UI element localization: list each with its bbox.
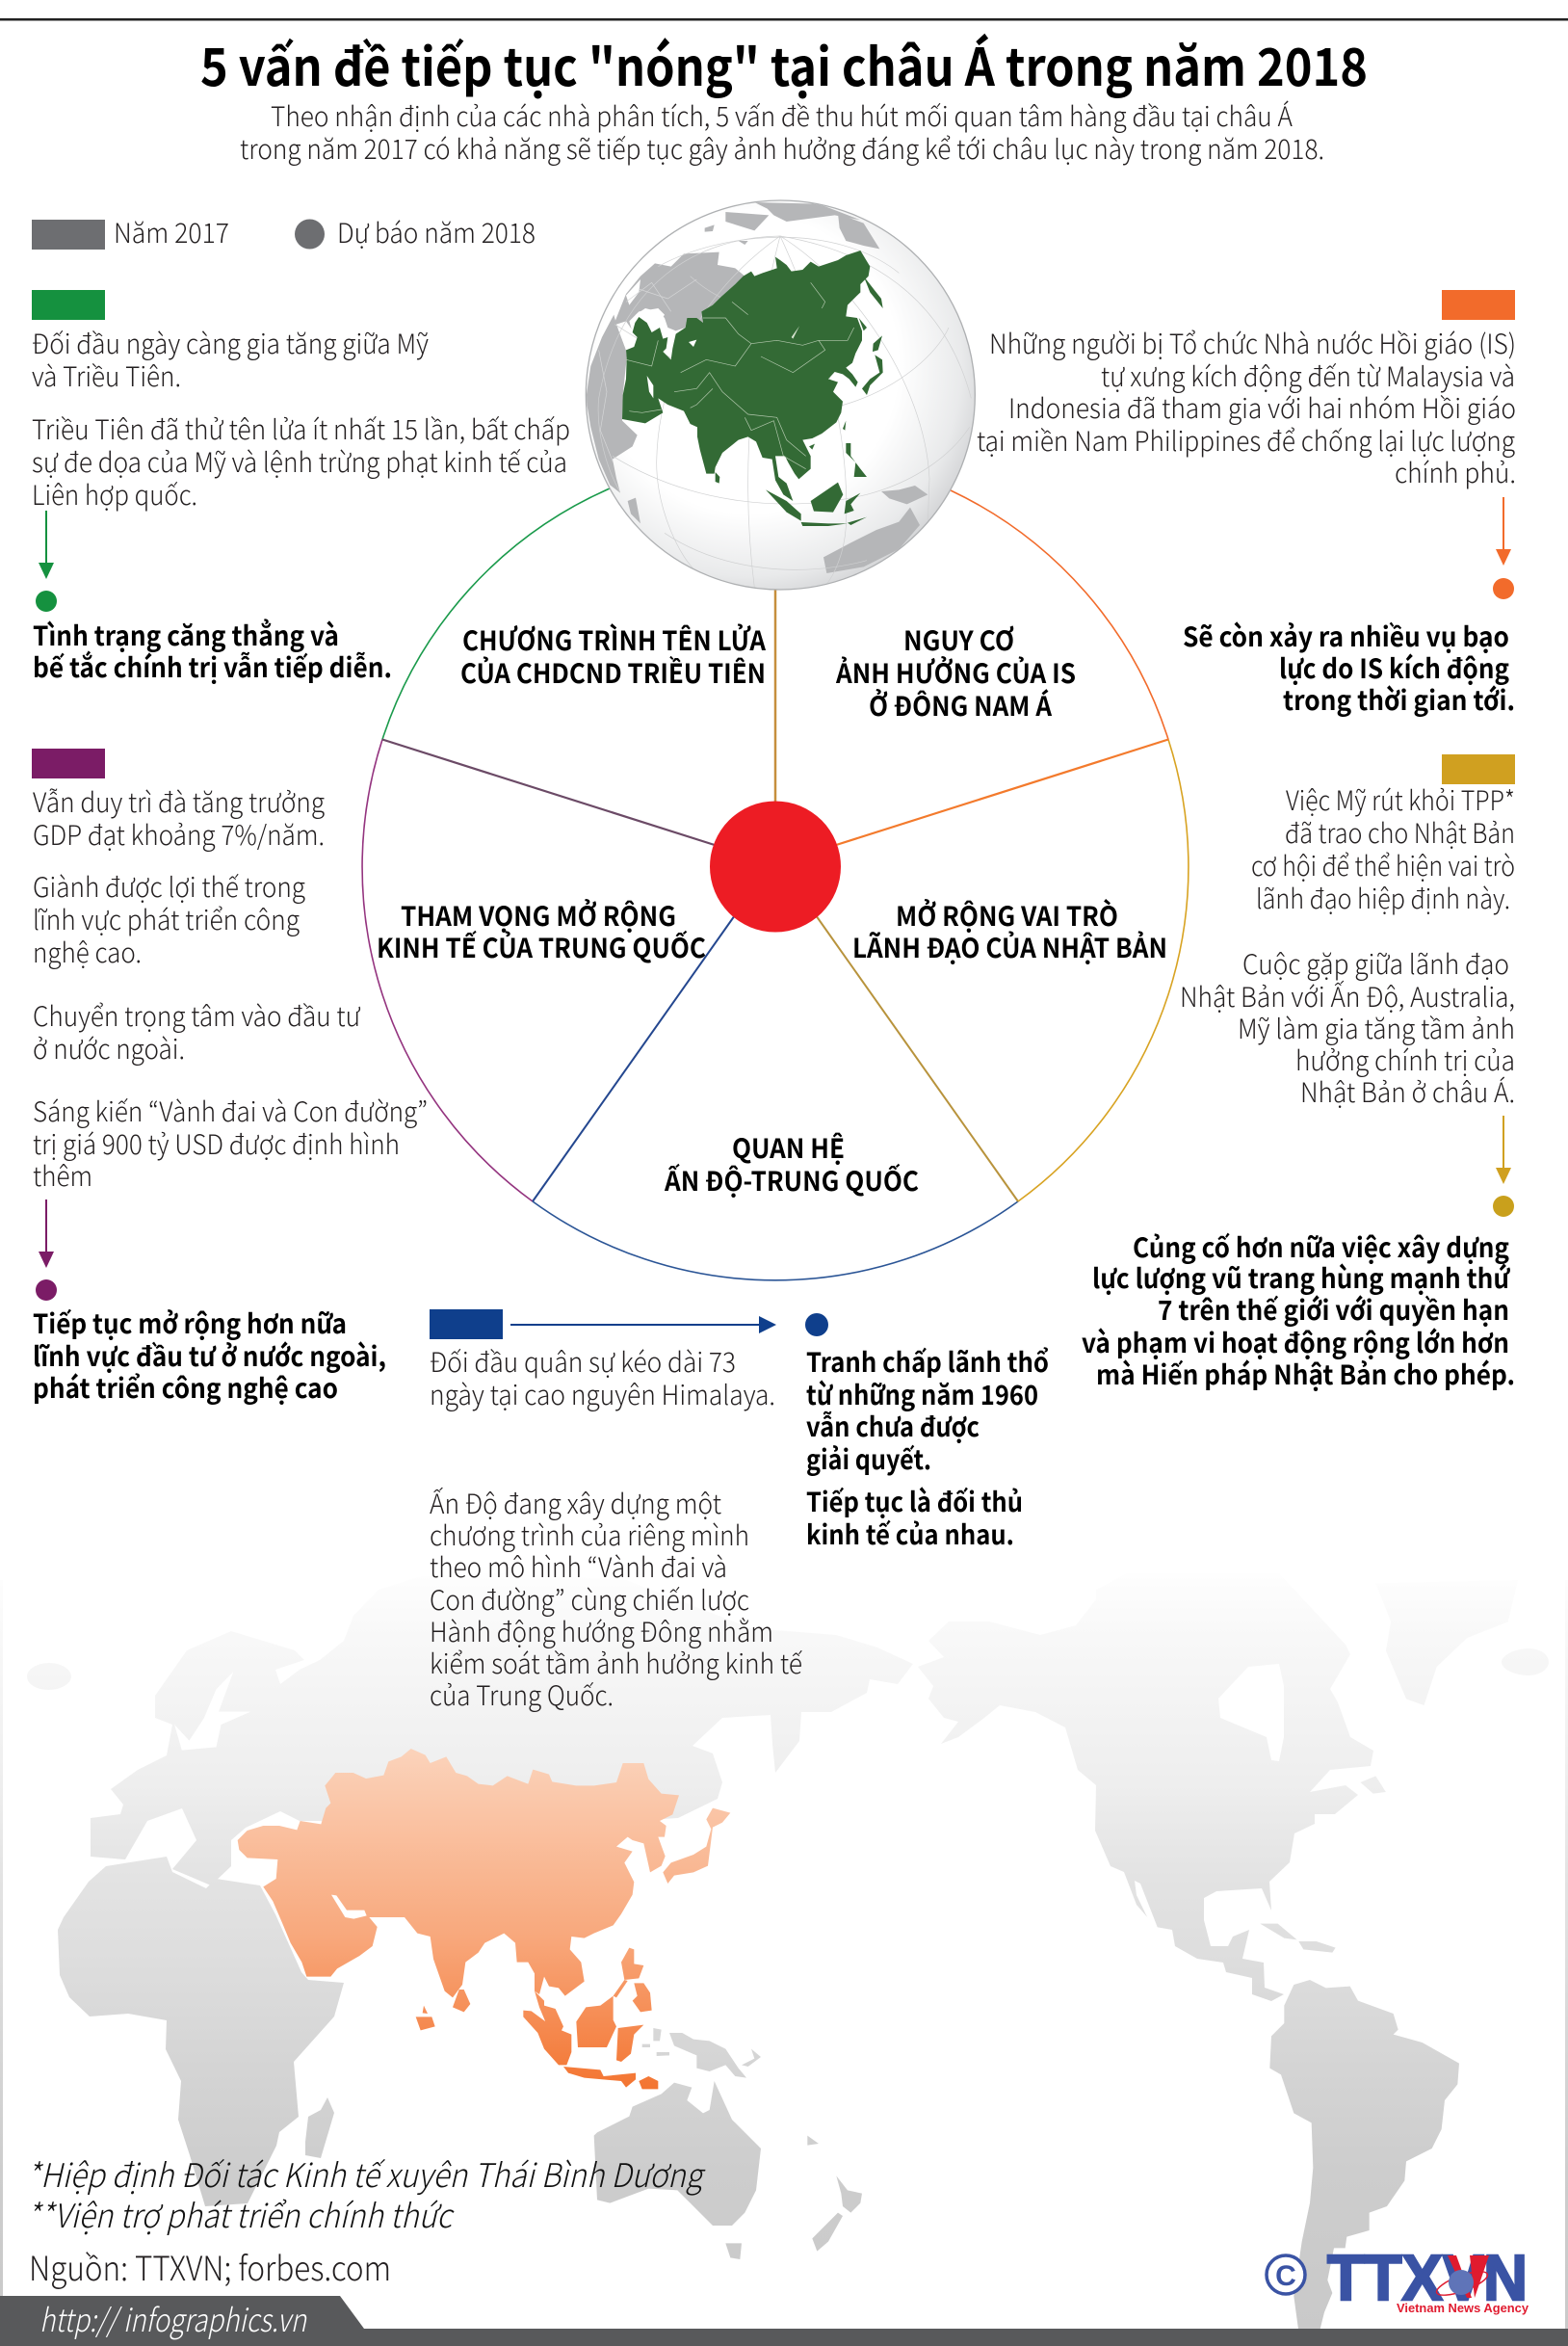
forecast text: trong thời gian tới. [1283, 680, 1515, 719]
footnotes: **Viện trợ phát triển chính thức [27, 2190, 455, 2237]
intro text: trong năm 2017 có khả năng sẽ tiếp tục gây ảnh hưởng đáng kể tới châu lục này trong năm 2018. [240, 129, 1324, 168]
text: 2017: theo mô hình “Vành đai và [430, 1547, 727, 1586]
forecast text: bế tắc chính trị vẫn tiếp diễn. [33, 647, 392, 686]
text: 2017: Những người bị Tổ chức Nhà nước Hồi giáo (IS) [989, 324, 1516, 362]
text: 2017 [977, 324, 1516, 491]
text: 2017: tự xưng kích động đến từ Malaysia và [1101, 356, 1515, 395]
forecast dot [36, 1279, 57, 1301]
wheel labels: ẤN ĐỘ-TRUNG QUỐC [664, 1161, 919, 1199]
text: 2017: đã trao cho Nhật Bản [1285, 813, 1515, 852]
text: 2017: Con đường” cùng chiến lược [430, 1580, 749, 1619]
legend: Năm 2017 [114, 213, 229, 251]
top rule [0, 18, 1568, 21]
forecast text: vẫn chưa được [806, 1407, 980, 1445]
forecast text: và phạm vi hoạt động rộng lớn hơn [1082, 1323, 1509, 1361]
text: 2017 [32, 324, 570, 514]
forecast text: lực lượng vũ trang hùng mạnh thứ [1092, 1258, 1510, 1297]
text: 2017: trị giá 900 tỷ USD được định hình [33, 1124, 400, 1163]
legend [32, 213, 536, 251]
text: 2017: Chuyển trọng tâm vào đầu tư [33, 996, 360, 1035]
wheel labels: Ở ĐÔNG NAM Á [869, 686, 1053, 725]
map: water cut-outs [174, 1664, 1284, 1929]
text: 2017: sự đe dọa của Mỹ và lệnh trừng phạt kinh tế của [32, 442, 567, 481]
text: 2017 [430, 1342, 802, 1714]
wheel labels: QUAN HỆ [732, 1128, 845, 1167]
text: 2017: của Trung Quốc. [430, 1675, 614, 1714]
forecast text: từ những năm 1960 [806, 1375, 1038, 1413]
wheel labels: KINH TẾ CỦA TRUNG QUỐC [377, 928, 706, 966]
website url: http:// infographics.vn [39, 2295, 307, 2341]
text: 2017: và Triều Tiên. [32, 356, 181, 395]
panel: IS in Southeast Asia [977, 290, 1516, 719]
arrow [510, 1316, 776, 1333]
forecast text: Tiếp tục mở rộng hơn nữa [33, 1304, 347, 1342]
text: 2017: Vẫn duy trì đà tăng trưởng [33, 782, 325, 821]
text: 2017: Việc Mỹ rút khỏi TPP* [1286, 780, 1515, 819]
forecast text: phát triển công nghệ cao [33, 1368, 338, 1407]
footer bar [0, 2295, 1568, 2346]
text: 2017: chương trình của riêng mình [430, 1516, 749, 1554]
panel: China [32, 749, 428, 1407]
colour key: green [32, 290, 105, 320]
forecast text: mà Hiến pháp Nhật Bản cho phép. [1096, 1355, 1515, 1393]
footnotes [27, 2149, 706, 2237]
panel: Japan [1082, 754, 1515, 1393]
forecast text [33, 616, 392, 686]
map: Red Sea gulf cut-out [331, 1895, 367, 1919]
text: 2017: hưởng chính trị của [1295, 1041, 1515, 1079]
text: 2017: tại miền Nam Philippines để chống lại lực lượng [977, 421, 1515, 460]
world map: grey continents [27, 1654, 1549, 2329]
globe: inland water and borders [599, 279, 854, 469]
colour key: blue [430, 1309, 503, 1339]
forecast text [1082, 1227, 1515, 1393]
text: 2017: Sáng kiến “Vành đai và Con đường” [33, 1092, 428, 1130]
text: 2017: Giành được lợi thế trong [33, 867, 305, 906]
legend: Dự báo năm 2018 [337, 213, 536, 251]
globe: white seas over grey land [616, 279, 665, 350]
forecast text: Sẽ còn xảy ra nhiều vụ bạo [1183, 617, 1509, 655]
forecast text: Tiếp tục là đối thủ [806, 1482, 1023, 1520]
world map: highlighted Asia in orange [237, 1749, 730, 2089]
forecast dot [805, 1313, 828, 1336]
wheel diagram [362, 488, 1189, 1280]
forecast dot [36, 591, 57, 612]
text: 2017: Ấn Độ đang xây dựng một [430, 1484, 721, 1522]
panel: North Korea [32, 290, 570, 686]
text: 2017: Mỹ làm gia tăng tầm ảnh [1238, 1009, 1515, 1047]
logo: TTXVN: C [1275, 2260, 1296, 2292]
colour key: gold [1442, 754, 1515, 784]
source: Nguồn: TTXVN; forbes.com [29, 2242, 391, 2291]
wheel labels: CHƯƠNG TRÌNH TÊN LỬA [462, 620, 767, 659]
globe: graticule [598, 236, 971, 588]
forecast text: giải quyết. [806, 1439, 931, 1478]
wheel labels: ẢNH HƯỞNG CỦA IS [835, 653, 1076, 692]
arrow [39, 1199, 54, 1268]
text: 2017: Đối đầu quân sự kéo dài 73 [430, 1342, 736, 1381]
arrow [1496, 1116, 1511, 1184]
text: 2017: thêm [33, 1156, 92, 1195]
wheel labels: NGUY CƠ [903, 620, 1014, 659]
forecast dot [1493, 578, 1514, 599]
text: 2017: Cuộc gặp giữa lãnh đạo [1242, 944, 1509, 983]
text: 2017: Hành động hướng Đông nhằm [430, 1612, 773, 1650]
text: 2017: cơ hội để thể hiện vai trò [1251, 846, 1515, 884]
globe: Asia in green [622, 250, 883, 526]
colour key: purple [32, 749, 105, 778]
footnotes: *Hiệp định Đối tác Kinh tế xuyên Thái Bình Dương [27, 2149, 706, 2197]
globe [586, 200, 975, 590]
text: 2017: chính phủ. [1395, 453, 1516, 491]
forecast text [33, 1304, 386, 1407]
arrow [1496, 497, 1511, 566]
wheel labels [377, 620, 1167, 1199]
wheel labels: CỦA CHDCND TRIỀU TIÊN [460, 653, 766, 692]
wheel labels: MỞ RỘNG VAI TRÒ [896, 896, 1118, 935]
text: 2017: Indonesia đã tham gia với hai nhóm Hồi giáo [1008, 388, 1516, 427]
forecast text [806, 1342, 1049, 1553]
text: 2017: Liên hợp quốc. [32, 475, 197, 514]
globe: grey land [586, 202, 928, 573]
text: 2017: lãnh đạo hiệp định này. [1256, 879, 1510, 917]
forecast text: Tranh chấp lãnh thổ [806, 1342, 1049, 1381]
text: 2017: ở nước ngoài. [33, 1029, 185, 1068]
forecast text: Củng cố hơn nữa việc xây dựng [1133, 1227, 1509, 1266]
text: 2017: Nhật Bản ở châu Á. [1300, 1072, 1515, 1111]
logo: TTXVN: TTXVN [1327, 2242, 1528, 2314]
intro text [240, 96, 1324, 168]
map: side strips [0, 1580, 1568, 2332]
forecast dot [1493, 1196, 1514, 1217]
wheel labels: LÃNH ĐẠO CỦA NHẬT BẢN [852, 928, 1167, 966]
title: 5 vấn đề tiếp tục "nóng" tại châu Á trong năm 2018 [200, 25, 1368, 101]
text: 2017: Đối đầu ngày càng gia tăng giữa Mỹ [32, 324, 429, 362]
wheel labels: THAM VỌNG MỞ RỘNG [401, 896, 676, 935]
text: 2017: kiểm soát tầm ảnh hưởng kinh tế [430, 1644, 802, 1682]
text: 2017 [1180, 780, 1515, 1111]
forecast text: kinh tế của nhau. [806, 1515, 1014, 1553]
forecast text: lực do IS kích động [1279, 648, 1509, 687]
arrow [39, 511, 54, 579]
text: 2017: Triều Tiên đã thử tên lửa ít nhất 15 lần, bất chấp [32, 409, 570, 448]
text: 2017: GDP đạt khoảng 7%/năm. [33, 815, 325, 854]
forecast text: Tình trạng căng thẳng và [33, 616, 339, 654]
forecast text: lĩnh vực đầu tư ở nước ngoài, [33, 1336, 386, 1375]
forecast text: 7 trên thế giới với quyền hạn [1158, 1290, 1509, 1329]
text: 2017: ngày tại cao nguyên Himalaya. [430, 1375, 775, 1413]
panel: India-China [430, 1309, 1049, 1714]
text: 2017: lĩnh vực phát triển công [33, 900, 300, 938]
text: 2017: nghệ cao. [33, 933, 142, 971]
colour key: orange [1442, 290, 1515, 320]
forecast text [1183, 617, 1515, 719]
text: 2017 [33, 782, 428, 1195]
text: 2017: Nhật Bản với Ấn Độ, Australia, [1180, 977, 1515, 1015]
intro text: Theo nhận định của các nhà phân tích, 5 vấn đề thu hút mối quan tâm hàng đầu tại châu Á [271, 96, 1293, 135]
logo: TTXVN: Vietnam News Agency [1397, 2301, 1529, 2315]
